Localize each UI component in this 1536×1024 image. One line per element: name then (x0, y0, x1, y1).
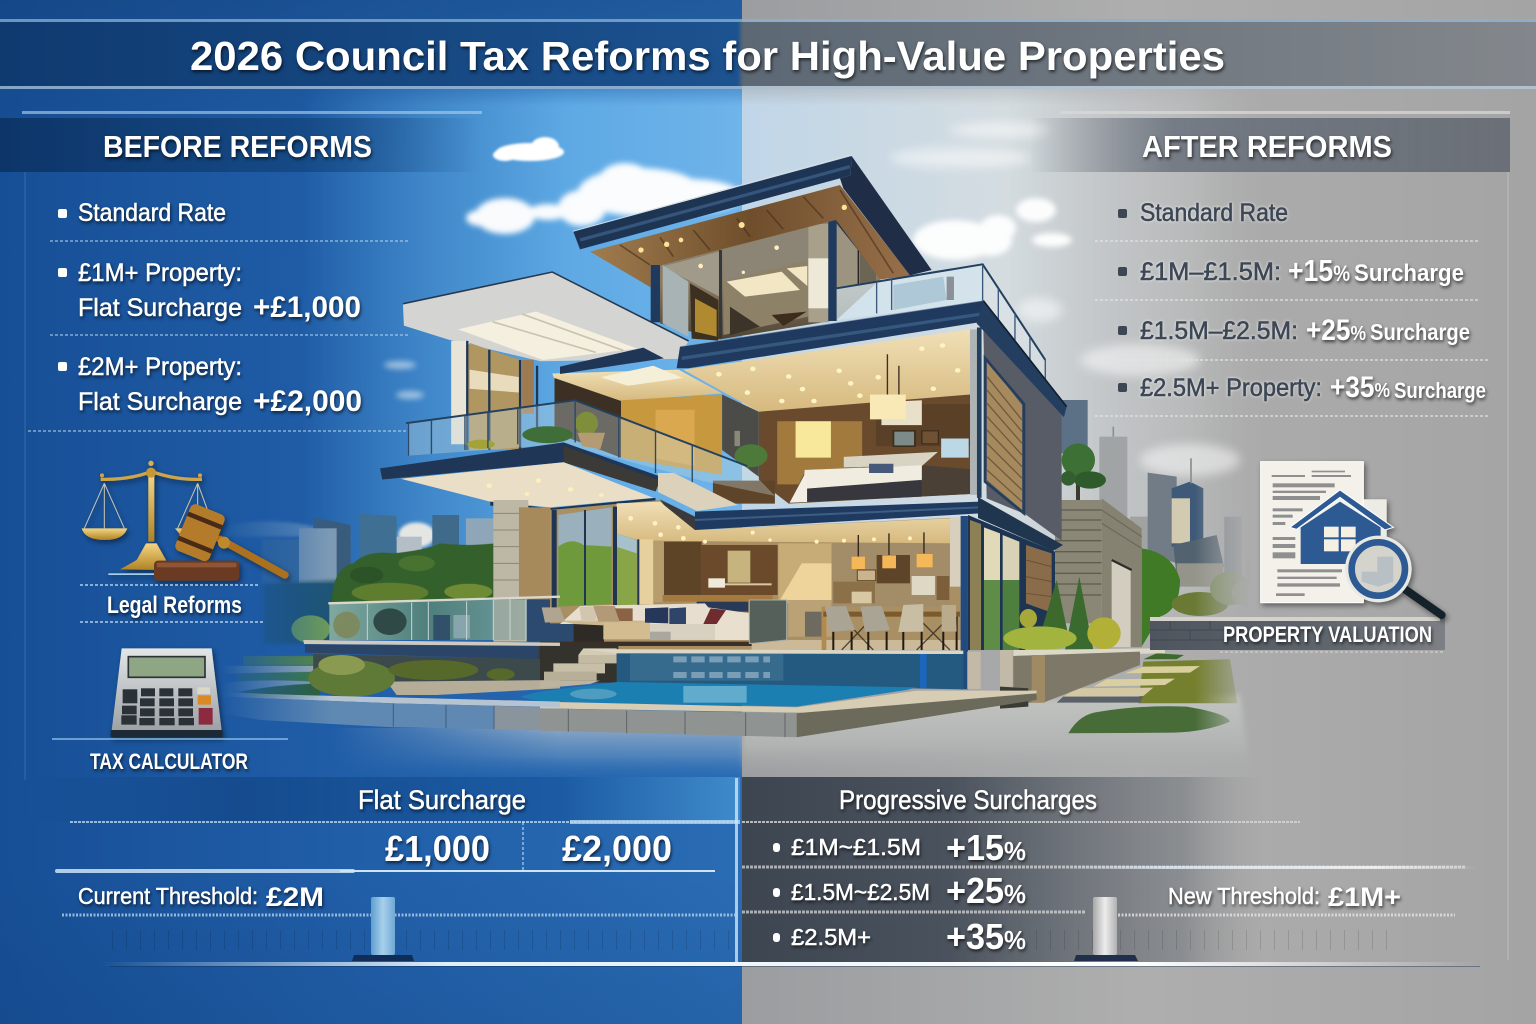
row: £2.5M+ +35%: +35% (946, 916, 1026, 957)
garage wall (1055, 498, 1142, 647)
lawn with stepping stones (1057, 653, 1237, 703)
after: £1.5M–£2.5M surcharge: Surcharge (1370, 319, 1470, 345)
house: white canopy (403, 272, 689, 416)
house: shrubs right of house (1003, 577, 1121, 650)
label: legal reforms: Legal Reforms (107, 592, 242, 619)
house: sofa (540, 600, 787, 646)
icon: scales of justice and gavel (82, 461, 285, 581)
threshold scale: current threshold £2M: Current Threshold: (78, 883, 258, 909)
panel: before reforms list (28, 199, 408, 431)
row: £1M~£1.5M +15%: £1M~£1.5M (791, 834, 921, 860)
icon: calculator (111, 648, 223, 737)
threshold scale: new threshold £1M+ (1020, 882, 1455, 961)
house: right side wall (983, 327, 1062, 541)
before: £1M+ flat surcharge: Flat Surcharge (78, 294, 242, 322)
panel: after reforms list (1095, 199, 1490, 416)
house: upper floor room (651, 218, 882, 341)
house: pool front wall (583, 649, 981, 689)
house: lower slab (660, 499, 980, 689)
after: £1M–£1.5M surcharge: £1M–£1.5M: (1140, 258, 1281, 286)
after: £1M–£1.5M surcharge: +15% (1288, 253, 1350, 288)
before: £1M+ flat surcharge: +£1,000 (253, 291, 361, 324)
threshold scale: new threshold £1M+: £1M+ (1328, 882, 1401, 912)
background: blue before half (0, 0, 742, 1024)
house: balcony (380, 400, 775, 513)
before reforms header (0, 111, 482, 172)
after: £1.5M–£2.5M surcharge (1118, 314, 1470, 347)
house: stone column (493, 500, 560, 642)
house: mid slab (560, 301, 1067, 417)
background: grey after half (742, 0, 1536, 1024)
after: £1M–£1.5M surcharge (1118, 253, 1464, 288)
left landscape: skyline and trees (220, 514, 494, 697)
skyline: right (1062, 400, 1241, 587)
house: bedroom level (683, 328, 979, 504)
heading: flat surcharge: Flat Surcharge (358, 785, 526, 815)
trees behind wall (1142, 548, 1244, 646)
heading: progressive surcharges: Progressive Surcharges (839, 785, 1097, 815)
paving: lower right (742, 695, 1250, 778)
sky backdrop (324, 89, 1210, 630)
house: mid floor hall (552, 366, 775, 504)
after: £2.5M+ surcharge (1118, 371, 1486, 404)
skyline: left (220, 514, 494, 584)
row: £1.5M~£2.5M +25% (773, 870, 1026, 911)
header band (0, 19, 1536, 89)
row: £2.5M+ +35%: £2.5M+ (791, 924, 871, 950)
after: £2.5M+ surcharge: +35% (1330, 371, 1390, 404)
after: standard rate: Standard Rate (1140, 199, 1288, 227)
house: right glazing (968, 515, 1055, 650)
row: £1.5M~£2.5M +25%: £1.5M~£2.5M (791, 879, 930, 905)
label: property valuation: PROPERTY VALUATION (1223, 622, 1432, 647)
row: £1M~£1.5M +15%: +15% (946, 827, 1026, 868)
after reforms header: AFTER REFORMS (1142, 129, 1392, 164)
before: £2M+ flat surcharge (58, 353, 362, 418)
clouds (384, 122, 1240, 476)
garden lawns (220, 656, 320, 697)
panel: flat surcharge (20, 777, 740, 873)
foreground bush (1068, 706, 1230, 733)
paving: lower left (350, 728, 742, 770)
house: staircase (658, 473, 738, 511)
after reforms header (1030, 111, 1510, 172)
house: swimming pool water (520, 681, 917, 707)
flat amount: £2,000: £2,000 (562, 828, 672, 869)
threshold scale: current threshold £2M: £2M (266, 882, 324, 912)
after: £1.5M–£2.5M surcharge: +25% (1306, 314, 1366, 347)
house: rooftop glass railing (837, 264, 1045, 383)
before reforms header: BEFORE REFORMS (103, 129, 372, 164)
after: £2.5M+ surcharge: Surcharge (1394, 378, 1486, 403)
property valuation band (1150, 617, 1445, 652)
house: glass deck railing and terrace (303, 597, 560, 682)
before: £1M+ flat surcharge (58, 259, 361, 324)
house: pool steps and dark block (540, 646, 618, 683)
row: £1M~£1.5M +15% (773, 827, 1026, 868)
icon: property valuation document with magnifier (1261, 462, 1442, 615)
before: £1M+ flat surcharge: £1M+ Property: (78, 259, 242, 287)
panel: progressive surcharges (742, 777, 1465, 963)
threshold scale: current threshold £2M (62, 882, 735, 961)
after: £2.5M+ surcharge: £2.5M+ Property: (1140, 374, 1322, 402)
house illustration (220, 155, 1165, 737)
house: garden shrubs and patio (308, 655, 560, 697)
threshold scale: new threshold £1M+: New Threshold: (1168, 883, 1320, 909)
row: £1.5M~£2.5M +25%: +25% (946, 870, 1026, 911)
row: £2.5M+ +35% (773, 916, 1026, 957)
before: £2M+ flat surcharge: Flat Surcharge (78, 388, 242, 416)
before: £2M+ flat surcharge: +£2,000 (253, 385, 362, 418)
before: standard rate: Standard Rate (78, 199, 226, 227)
label: tax calculator: TAX CALCULATOR (90, 749, 248, 774)
garden trees (263, 543, 494, 643)
before: £2M+ flat surcharge: £2M+ Property: (78, 353, 242, 381)
house: low stone wall (1000, 648, 1165, 709)
right landscape: skyline, garage, trees and garden path (1055, 398, 1262, 733)
house: roof (573, 155, 932, 287)
house: ground floor room (550, 500, 961, 650)
tree on roof (1061, 443, 1106, 500)
house: lower slab side (978, 497, 1063, 551)
house: dining set (822, 604, 960, 650)
after: £1M–£1.5M surcharge: Surcharge (1354, 260, 1464, 287)
flat amount: £1,000: £1,000 (385, 828, 490, 869)
house: pool rim (220, 691, 1037, 737)
house: left glazed room (451, 341, 537, 450)
title: 2026 Council Tax Reforms for High-Value Properties (190, 33, 1225, 79)
after: £1.5M–£2.5M surcharge: £1.5M–£2.5M: (1140, 317, 1298, 345)
